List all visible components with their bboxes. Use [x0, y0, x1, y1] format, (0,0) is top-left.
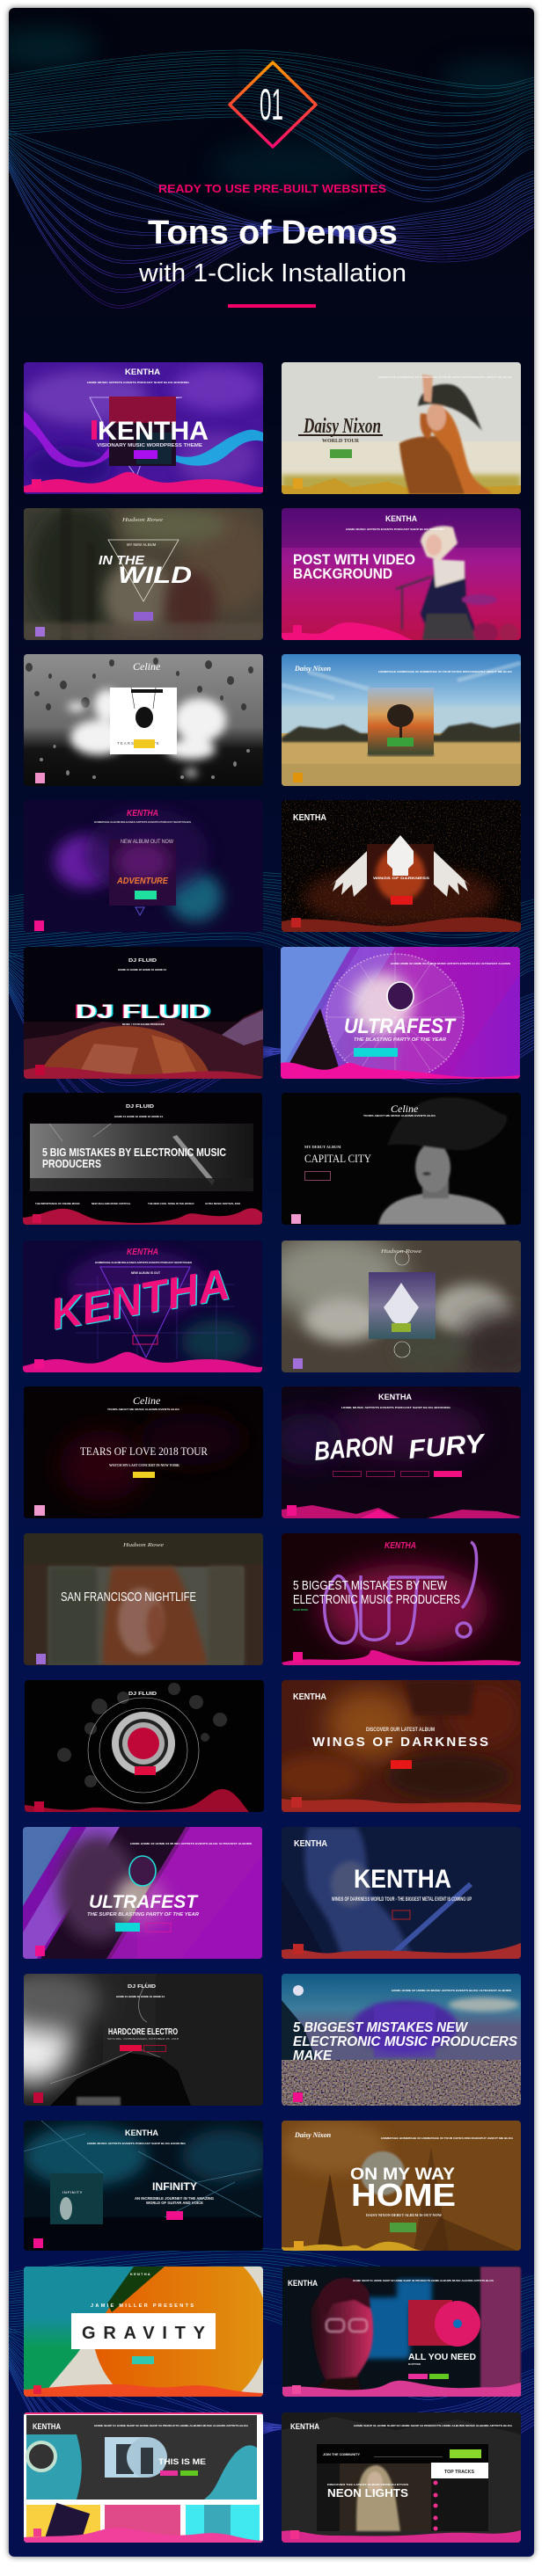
- button: [134, 739, 155, 748]
- badge: [292, 1069, 302, 1079]
- logo: KENTHA: [290, 2422, 319, 2431]
- badge: [287, 1505, 297, 1516]
- hero panel: [26, 2415, 257, 2500]
- title: [42, 1146, 226, 1170]
- album cover: TEARS OF LOVE: [117, 741, 160, 746]
- demo card: Kentha synthwave: [23, 1241, 264, 1372]
- badge: [34, 921, 44, 931]
- subtitle: WORLD TOUR: [322, 439, 360, 444]
- title: [293, 2020, 518, 2063]
- title: IN THE: [99, 553, 145, 568]
- album cover: ADVENTURE: [116, 877, 168, 886]
- audio wave: [23, 1208, 264, 1225]
- photo: [317, 2463, 431, 2531]
- triangle: [136, 907, 144, 915]
- badge: [35, 627, 45, 637]
- badge: [293, 2092, 303, 2102]
- logo: DJ FLUID: [128, 958, 157, 964]
- badge: [293, 1652, 303, 1663]
- demo card: Daisy Nixon: [282, 362, 521, 494]
- logo: Daisy Nixon: [294, 2131, 332, 2139]
- audio wave: [282, 622, 414, 640]
- demo card: In the Wild: [24, 508, 270, 640]
- eyebrow: pre-built websites: READY TO USE PRE-BUILT WEBSITES: [158, 182, 386, 195]
- title: NEON LIGHTS: [327, 2486, 408, 2500]
- demo card: 5 big mistakes: [23, 1093, 264, 1225]
- nav: HOMEPAGE ALBUM RELEASES ARTISTS EVENTS PODCAST SHOP PAGES: [95, 1261, 192, 1264]
- badge: [290, 2530, 299, 2539]
- badge: [34, 1801, 44, 1812]
- feature photo: [30, 1124, 253, 1191]
- eyebrow: NEW ALBUM IS OUT: [131, 1271, 161, 1275]
- top tracks: TOP TRACKS: [444, 2470, 474, 2475]
- description: [135, 2196, 215, 2205]
- logo: KENTHA: [385, 1541, 416, 1551]
- badge: [291, 1214, 301, 1224]
- logo: KENTHA: [293, 1692, 326, 1702]
- nav: HOME SHOP 01 HOME SHOP 02 HOME SHOP 03 PRODUCTS HOME ALBUMS MUSIC ALBUMS ARTISTS BLOG: [353, 2279, 494, 2282]
- badge: [293, 625, 302, 634]
- demo card: Neon Lights: [282, 2412, 521, 2543]
- emblem circles: [394, 1251, 410, 1357]
- nav: HOME MUSIC ARTISTS EVENTS PODCAST SHOP BLOG BOOKING: [341, 1406, 450, 1409]
- button: [135, 1766, 156, 1775]
- nav: HOME MUSIC ARTISTS EVENTS PODCAST SHOP BLOG BOOKING: [87, 381, 189, 384]
- orange circle: [92, 2240, 268, 2416]
- album cover: [110, 688, 177, 754]
- audio wave: [24, 2384, 263, 2397]
- eyebrow: MY DEBUT ALBUM: [304, 1145, 341, 1149]
- demo card: Post with video: [282, 508, 521, 644]
- badge: [35, 773, 45, 783]
- audio wave: [282, 2242, 422, 2251]
- logo: KENTHA: [125, 2128, 159, 2137]
- woman portrait: [378, 1097, 507, 1225]
- title box: GRAVITY: [82, 2324, 206, 2343]
- event details: SKYLINE, COPENHAGEN, OCTOBER 25, 2018: [107, 2037, 179, 2041]
- album cover: [368, 688, 434, 756]
- neon title: KENTHA: [48, 1260, 234, 1340]
- demo card: On My Way Home: [282, 2121, 521, 2252]
- album: INFINITY: [62, 2190, 83, 2194]
- link: READ MORE: [293, 1608, 308, 1612]
- title: DJ FLUID: [77, 1001, 212, 1022]
- album cover: [109, 397, 176, 466]
- album cover: [109, 840, 176, 906]
- neon title: KENTHA: [47, 1259, 233, 1339]
- audio wave: [23, 1352, 262, 1372]
- wave lines: lower: [9, 2248, 534, 2434]
- heading: NEW ALBUM OUT NOW: [121, 839, 174, 845]
- related posts: THE NEW COOL THING IN THE WORLD: [148, 1202, 194, 1205]
- title: MAKE: [293, 2048, 333, 2063]
- logo: DJ FLUID: [126, 1104, 155, 1110]
- title: INFINITY: [152, 2180, 197, 2193]
- portrait: [48, 1567, 244, 1665]
- album and CD: [105, 2437, 167, 2478]
- subtitle: MY NEW ALBUM: [127, 542, 157, 547]
- signature: [298, 418, 383, 437]
- demo card: San Francisco Nightlife: [24, 1533, 264, 1665]
- demo card: Neon Out: [282, 1533, 521, 1665]
- nav: HOME MUSIC ARTISTS EVENTS PODCAST SHOP BLOG BOOKING: [346, 528, 444, 531]
- title: 5 BIG MISTAKES BY ELECTRONIC MUSIC: [42, 1146, 226, 1159]
- accent underline: [228, 304, 316, 308]
- signature: Daisy Nixon: [303, 415, 381, 438]
- badge: [294, 2241, 304, 2251]
- demo card: Baron Fury: [273, 1386, 521, 1518]
- button: [387, 738, 414, 746]
- title: SAN FRANCISCO NIGHTLIFE: [61, 1590, 196, 1605]
- nav: HOME HOME 02 HOME 03 MUSIC ARTISTS EVENTS BLOG ULTRAFEST ALBUMS: [392, 1989, 511, 1992]
- button: [392, 1323, 411, 1332]
- logo emblem: [129, 1856, 156, 1886]
- brush title: BARON: [313, 1430, 395, 1466]
- audio wave: [282, 1505, 521, 1518]
- singer: [396, 526, 518, 644]
- bokeh: [57, 1683, 227, 1787]
- planet: [37, 1026, 213, 1158]
- button: [133, 1335, 157, 1344]
- guitarist: [282, 1827, 471, 1959]
- buttons: [333, 1471, 462, 1477]
- audio wave: [282, 1650, 521, 1665]
- button: [354, 1048, 398, 1057]
- tagline: VISIONARY MUSIC WORDPRESS THEME: [97, 443, 203, 448]
- demo card: smoke and wolf: [264, 1232, 542, 1381]
- badge: [35, 1065, 45, 1075]
- title: ELECTRONIC MUSIC PRODUCERS: [293, 2034, 518, 2049]
- brush title: [313, 1429, 487, 1466]
- title: ULTRAFEST: [344, 1015, 457, 1038]
- logo: Daisy Nixon: [294, 665, 332, 673]
- title: [92, 420, 208, 440]
- badge: [35, 1946, 45, 1956]
- audio wave: [281, 1062, 520, 1081]
- rings: [88, 1698, 199, 1803]
- title: CAPITAL CITY: [304, 1152, 372, 1165]
- logo: DJ FLUID: [128, 1984, 157, 1990]
- demo card: Gravity: [24, 2240, 268, 2416]
- nav: TOURS ABOUT ME MUSIC ALBUMS EVENTS BLOG: [107, 1408, 179, 1411]
- crowd: [282, 2060, 521, 2106]
- description: WORLD OF GUITAR AND VOICE: [146, 2201, 203, 2205]
- buttons: [160, 2470, 198, 2476]
- title box: [71, 2313, 216, 2349]
- button: [133, 1472, 155, 1478]
- title: POST WITH VIDEO: [293, 552, 415, 568]
- nav: HOME MUSIC ARTISTS EVENTS PODCAST SHOP BLOG BOOKING: [87, 2142, 186, 2145]
- logo: Celine: [133, 660, 161, 673]
- title: [294, 554, 415, 579]
- tagline: MUSIC / YOUR SOUND PRODUCER: [122, 1022, 165, 1026]
- demo card: New Album Out Now: [24, 800, 263, 932]
- nav: HOME 01 HOME 02 HOME 03 HOME 04: [116, 1995, 165, 1998]
- logo: KENTHA: [127, 809, 158, 819]
- logo emblem: [293, 1985, 304, 1996]
- button: [390, 2223, 416, 2232]
- grid: [76, 1276, 234, 1359]
- title: HOME: [351, 2177, 456, 2213]
- button: [134, 612, 153, 621]
- title: BACKGROUND: [293, 566, 392, 582]
- audio wave: [24, 2528, 263, 2543]
- title: [293, 1579, 460, 1607]
- badge: [34, 1505, 45, 1516]
- title: ULTRAFEST: [89, 1892, 199, 1912]
- demo card: This Is Me: [24, 2412, 263, 2547]
- nav: HOME 01 HOME 02 HOME 03 HOME 04: [114, 1115, 163, 1118]
- title: WINGS OF DARKNESS: [312, 1735, 488, 1750]
- demo card: Ultrafest party: [23, 1827, 264, 1981]
- background glow: [0, 29, 542, 193]
- title: [350, 2165, 456, 2213]
- wave lines: top: [9, 50, 534, 309]
- nav: HOME HOME 02 HOME 03 MUSIC ARTISTS EVENTS BLOG ULTRAFEST ALBUMS: [130, 1842, 252, 1845]
- audio wave: [282, 2381, 521, 2397]
- tagline: WINGS OF DARKNESS WORLD TOUR - THE BIGGEST METAL EVENT IS COMING UP: [332, 1897, 472, 1903]
- triangle outline: [108, 540, 179, 601]
- badge: [36, 1654, 46, 1664]
- nav: HOMEPAGE HOMEPAGE 02 HOMEPAGE 03 TOUR DATES DISCOGRAPHY ABOUT ME BLOG: [378, 670, 512, 673]
- title: PRODUCERS: [42, 1157, 101, 1170]
- logo: DJ FLUID: [128, 1692, 157, 1697]
- badge: [33, 2385, 41, 2394]
- wave lines: middle: [9, 872, 534, 1093]
- logo: KENTHA: [33, 2422, 61, 2431]
- nav: HOMEPAGE ALBUM RELEASES ARTISTS EVENTS PODCAST SHOP PAGES: [94, 820, 191, 824]
- thumbnails: [26, 2503, 260, 2547]
- title: ALL YOU NEED: [408, 2353, 476, 2362]
- demo card: Hardcore Electro: [0, 1969, 264, 2106]
- title: THIS IS ME: [158, 2457, 206, 2466]
- eyebrow: JAMIE MILLER PRESENTS: [91, 2303, 194, 2309]
- badge: [293, 478, 303, 489]
- button: [304, 1171, 331, 1180]
- tagline: DAISY NIXON DEBUT ALBUM IS OUT NOW: [366, 2213, 443, 2217]
- brush title: FURY: [407, 1429, 487, 1465]
- demo card: Kentha purple: [24, 362, 263, 494]
- eyebrow: DISCOVER OUR LATEST ALBUM: [366, 1727, 435, 1733]
- title: TEARS OF LOVE 2018 TOUR: [80, 1444, 208, 1458]
- buttons: [115, 1923, 171, 1932]
- button: [391, 1760, 412, 1769]
- related posts: NEW ZEALAND MUSIC FESTIVAL: [92, 1202, 131, 1205]
- badge: [292, 2385, 301, 2394]
- demo card: Wings of Darkness album: [282, 800, 521, 932]
- logo: Celine: [133, 1394, 161, 1407]
- album title: WINGS OF DARKNESS: [373, 877, 430, 880]
- audio wave: [282, 917, 521, 932]
- artist: DJ RYVAN: [408, 2362, 421, 2366]
- tagline: WATCH MY LAST CONCERT IN NEW YORK: [109, 1463, 180, 1467]
- title: ON MY WAY: [350, 2165, 455, 2184]
- woman: [399, 375, 493, 494]
- community bar: [317, 2444, 488, 2463]
- audio wave: [282, 2530, 521, 2543]
- badge: [293, 1358, 303, 1369]
- man portrait: [307, 2278, 373, 2397]
- nav: HOMEPAGE HOMEPAGE 02 HOMEPAGE 03 TOUR DATES DISCOGRAPHY ABOUT ME BLOG: [381, 2136, 513, 2140]
- triangle outline: [100, 1267, 190, 1357]
- nav: HOME SHOP 01 HOME SHOP 02 HOME SHOP 03 PRODUCTS HOME ALBUMS MUSIC ALBUMS ARTISTS BLOG: [354, 2424, 512, 2427]
- related posts: THE IMPORTANCE OF ONLINE MUSIC: [35, 1202, 80, 1205]
- caption: DISCOVER THE LATEST ALBUM FROM DJ RYVAN: [327, 2483, 408, 2486]
- title: [99, 556, 192, 583]
- title: ELECTRONIC MUSIC PRODUCERS: [293, 1593, 460, 1607]
- audio wave: [24, 472, 263, 492]
- buttons: [120, 2045, 165, 2052]
- demo card: rain and clouds: [24, 654, 263, 786]
- neon sign: [325, 1542, 477, 1643]
- badge: [33, 2092, 43, 2103]
- button: [391, 896, 413, 905]
- badge: [33, 1214, 41, 1223]
- nav: HOME HOME 02 HOME 03 ALBUM MUSIC ARTISTS EVENTS BLOG ULTRAFEST ALBUMS: [391, 962, 510, 965]
- subheading: with 1-Click Installation: [138, 259, 406, 287]
- logo: Hudson Rowe: [122, 1543, 164, 1548]
- button: [132, 2356, 154, 2364]
- logo: Celine: [391, 1102, 419, 1115]
- lasers: [24, 2121, 261, 2217]
- logo: KENTHA: [385, 514, 417, 523]
- badge: [33, 2529, 41, 2536]
- logo: KENTHA: [127, 1248, 158, 1257]
- button: [166, 2211, 183, 2220]
- logo: KENTHA: [378, 1393, 413, 1401]
- silhouette: [50, 1983, 191, 2106]
- logo: KENTHA: [294, 1838, 327, 1849]
- clouds: [68, 689, 226, 776]
- album cover: [367, 844, 434, 910]
- demo card: golden field: [282, 654, 521, 786]
- logo: KENTHA: [125, 367, 161, 376]
- title: KENTHA: [98, 417, 209, 446]
- logo: Hudson Rowe: [380, 1249, 421, 1255]
- top tracks: [431, 2463, 488, 2531]
- tagline: THE BLASTING PARTY OF THE YEAR: [354, 1037, 446, 1043]
- title: KENTHA: [354, 1865, 451, 1894]
- nav: HOME 01 HOME 02 HOME 03 HOME 04: [118, 968, 166, 971]
- button: [134, 450, 157, 459]
- button: [135, 891, 157, 899]
- album cover: [369, 1272, 436, 1339]
- blue bokeh: [357, 2280, 432, 2359]
- audio wave: [282, 1799, 521, 1812]
- badge: [34, 1359, 44, 1369]
- sphere: [326, 951, 464, 1081]
- logo: Hudson Rowe: [121, 518, 163, 523]
- mountains: [24, 1008, 263, 1079]
- demo card: DJ Fluid vinyl: [25, 1680, 264, 1812]
- button: [330, 449, 352, 458]
- nav: HOMEPAGE HOMEPAGE 02 HOMEPAGE 03 TOUR DATES DISCOGRAPHY ABOUT ME BLOG: [378, 375, 512, 379]
- vinyl: [112, 1712, 175, 1775]
- badge: [33, 2238, 43, 2248]
- wings: [330, 851, 471, 897]
- demo card: Capital City: [282, 1093, 521, 1225]
- demo card: Wings of Darkness painting: [273, 1680, 521, 1812]
- button: [392, 1910, 410, 1919]
- top brand: KENTHA: [130, 2272, 151, 2276]
- logo emblem: [387, 982, 414, 1010]
- stage: [352, 2000, 458, 2057]
- related posts: ULTRA MUSIC FESTIVAL 2018: [205, 1202, 240, 1205]
- album and CD: [408, 2300, 480, 2347]
- demo card: DJ Fluid: [24, 947, 263, 1158]
- title: 5 BIGGEST MISTAKES BY NEW: [293, 1579, 447, 1593]
- badge: [293, 773, 303, 782]
- nav: TOURS ABOUT ME MUSIC ALBUMS EVENTS BLOG: [363, 1114, 436, 1117]
- audio wave: [282, 1943, 521, 1959]
- demo card: Infinity: [24, 2121, 270, 2251]
- title: WILD: [118, 562, 192, 588]
- title: DJ FLUID: [74, 1001, 209, 1022]
- related posts: [35, 1202, 240, 1205]
- album: [50, 2173, 103, 2224]
- badge: [32, 479, 41, 484]
- title: 5 BIGGEST MISTAKES NEW: [293, 2020, 468, 2035]
- title: HARDCORE ELECTRO: [108, 2027, 178, 2037]
- icon: numbered diamond: 01: [260, 80, 283, 129]
- buttons: [408, 2374, 449, 2379]
- title: DJ FLUID: [76, 1001, 209, 1022]
- icon: numbered diamond: [230, 62, 316, 147]
- badge: [291, 1797, 302, 1808]
- demo card: Tears of Love tour: [24, 1386, 264, 1518]
- title: [74, 1001, 212, 1022]
- heading: Tons of Demos: [148, 215, 398, 251]
- demo card: festival crowd: [282, 1974, 521, 2106]
- curtain: [480, 2267, 521, 2397]
- tagline: THE SUPER BLASTING PARTY OF THE YEAR: [87, 1912, 199, 1917]
- description: AN INCREDIBLE JOURNEY IN THE AMAZING: [135, 2196, 215, 2201]
- community bar: JOIN THE COMMUNITY: [323, 2453, 360, 2456]
- logo: KENTHA: [293, 812, 326, 823]
- logo: KENTHA: [288, 2279, 318, 2288]
- nav: HOME SHOP 01 HOME SHOP 02 HOME SHOP 03 PRODUCTS HOME ALBUMS MUSIC ALBUMS ARTISTS BLOG: [94, 2424, 248, 2427]
- demo card: All You Need: [282, 2267, 521, 2397]
- demo card: Kentha metal: [282, 1827, 521, 1959]
- demo card: Ultrafest sphere: [281, 947, 520, 1081]
- audio wave: [25, 1789, 249, 1812]
- badge: [291, 918, 301, 928]
- skull: [387, 835, 414, 876]
- badge: [293, 1944, 304, 1954]
